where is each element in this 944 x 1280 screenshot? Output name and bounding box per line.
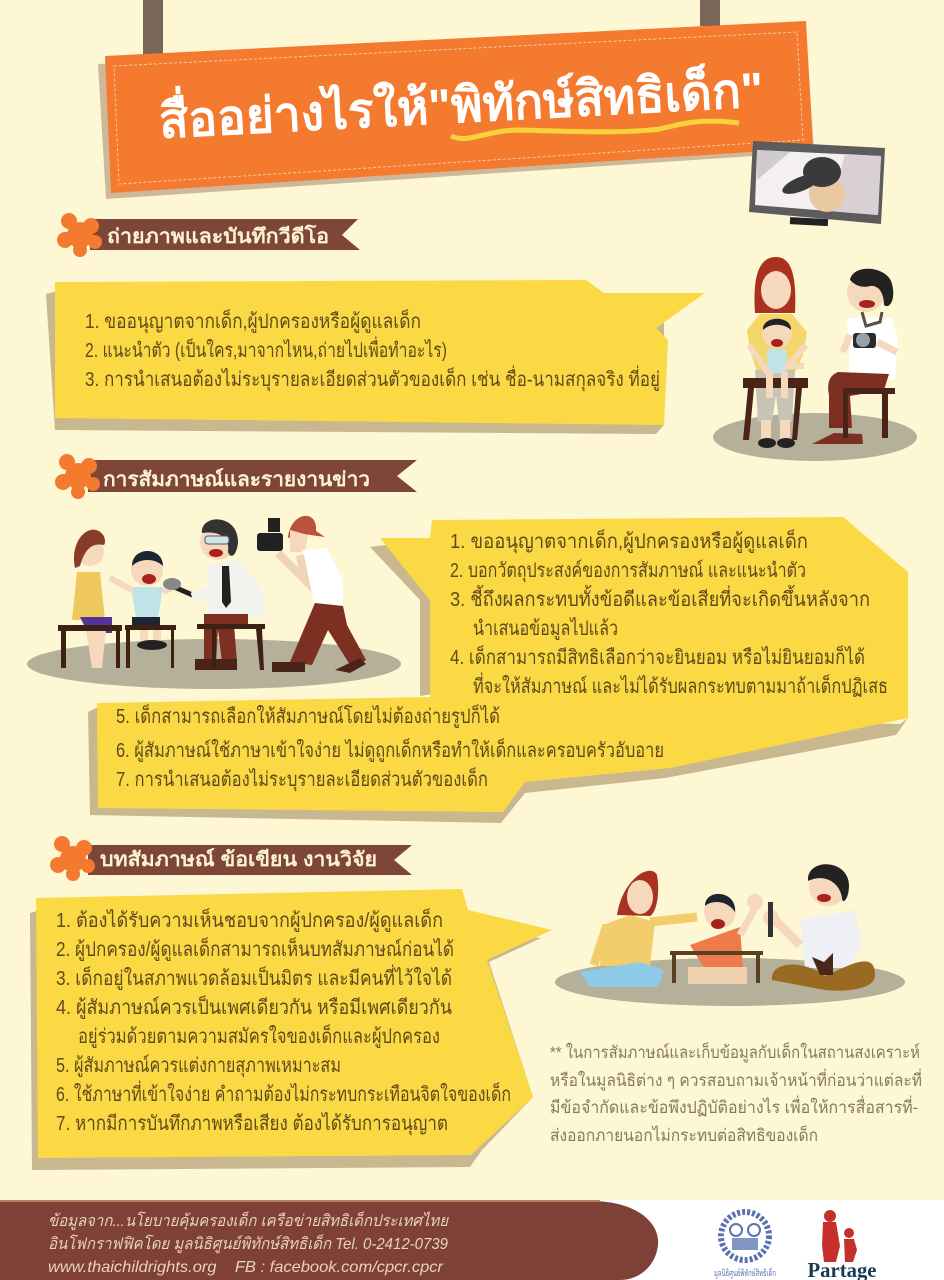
- table: [670, 951, 763, 983]
- panel: section 3 list: 1. ต้องได้รับความเห็นชอบจากผู้ปกครอง/ผู้ดูแลเด็ก: [56, 907, 443, 933]
- icon: orange flower: [50, 836, 95, 881]
- panel: section 2 list: 7. การนำเสนอต้องไม่ระบุรายละเอียดส่วนตัวของเด็ก: [116, 766, 488, 792]
- section 3 heading ribbon: บทสัมภาษณ์ ข้อเขียน งานวิจัย: [100, 848, 377, 871]
- footer credit band: ข้อมูลจาก...นโยบายคุ้มครองเด็ก เครือข่ายสิทธิเด็กประเทศไทย: [48, 1211, 450, 1231]
- footer background: [0, 1200, 944, 1280]
- note text: มีข้อจำกัดและข้อพึงปฏิบัติอย่างไร เพื่อให้การสื่อสารที่-: [550, 1095, 918, 1117]
- reporter: [200, 524, 236, 560]
- panel: section 3 list: 7. หากมีการบันทึกภาพหรือเสียง ต้องได้รับการอนุญาต: [56, 1112, 448, 1136]
- panel: section 1 list: 2. แนะนำตัว (เป็นใคร,มาจากไหน,ถ่ายไปเพื่อทำอะไร): [85, 336, 447, 362]
- icon: tv with masked child: [749, 141, 885, 226]
- illustration: interview with reporter and cameraman: [27, 516, 401, 689]
- section 1 heading ribbon: ถ่ายภาพและบันทึกวีดีโอ: [107, 224, 329, 248]
- woman: [617, 871, 658, 916]
- panel: section 3 list: 4. ผู้สัมภาษณ์ควรเป็นเพศเดียวกัน หรือมีเพศเดียวกัน: [56, 994, 452, 1020]
- note text: [550, 1041, 922, 1145]
- panel: section 2 list: [88, 517, 908, 823]
- panel: section 3 list: 5. ผู้สัมภาษณ์ควรแต่งกายสุภาพเหมาะสม: [56, 1054, 341, 1078]
- panel: section 2 list: 5. เด็กสามารถเลือกให้สัมภาษณ์โดยไม่ต้องถ่ายรูปก็ได้: [116, 703, 500, 729]
- icon: orange flower: [57, 213, 102, 257]
- logo: CPCR foundation: [714, 1212, 776, 1279]
- footer credit band: www.thaichildrights.org FB : facebook.com/cpcr.cpcr: [48, 1259, 444, 1276]
- mother's chair: [743, 378, 808, 440]
- panel: section 2 list: 1. ขออนุญาตจากเด็ก,ผู้ปกครองหรือผู้ดูแลเด็ก: [450, 528, 808, 554]
- panel: section 3 list: 3. เด็กอยู่ในสภาพแวดล้อมเป็นมิตร และมีคนที่ไว้ใจได้: [56, 964, 452, 991]
- woman: [76, 538, 104, 566]
- section 2 heading ribbon: [55, 454, 417, 499]
- panel: section 3 list: 6. ใช้ภาษาที่เข้าใจง่าย คำถามต้องไม่กระทบกระเทือนจิตใจของเด็ก: [56, 1080, 511, 1106]
- panel: section 3 list: 2. ผู้ปกครอง/ผู้ดูแลเด็กสามารถเห็นบทสัมภาษณ์ก่อนได้: [56, 936, 454, 962]
- boy: [704, 896, 736, 928]
- panel: section 2 list: 3. ชี้ถึงผลกระทบทั้งข้อดีและข้อเสียที่จะเกิดขึ้นหลังจาก: [450, 585, 870, 611]
- panel: section 2 list: 2. บอกวัตถุประสงค์ของการสัมภาษณ์ และแนะนำตัว: [450, 559, 806, 583]
- panel: section 1 list: 3. การนำเสนอต้องไม่ระบุรายละเอียดส่วนตัวของเด็ก เช่น ชื่อ-นามสกุลจริง ที่อยู่: [85, 365, 660, 392]
- section 3 heading ribbon: [50, 836, 412, 881]
- footer credit band: อินโฟกราฟฟิคโดย มูลนิธิศูนย์พิทักษ์สิทธิเด็ก Tel. 0-2412-0739: [48, 1234, 448, 1254]
- cameraman: [288, 516, 325, 538]
- panel: section 3 list: [30, 889, 552, 1170]
- panel: section 1 list: [46, 280, 705, 434]
- title underline squiggle: [451, 121, 739, 138]
- illustration: mother, child and photographer seated: [713, 257, 917, 461]
- section 1 heading ribbon: [57, 213, 360, 257]
- note text: ส่งออกภายนอกไม่กระทบต่อสิทธิของเด็ก: [550, 1124, 818, 1145]
- section 2 heading ribbon: การสัมภาษณ์และรายงานข่าว: [103, 468, 370, 491]
- panel: section 1 list: 1. ขออนุญาตจากเด็ก,ผู้ปกครองหรือผู้ดูแลเด็ก: [85, 308, 421, 334]
- illustration: family sitting on floor with table: [555, 864, 905, 1006]
- footer credit band: [0, 1200, 658, 1280]
- panel: section 2 list: นำเสนอข้อมูลไปแล้ว: [473, 617, 618, 641]
- man: [809, 868, 847, 906]
- panel: section 2 list: 6. ผู้สัมภาษณ์ใช้ภาษาเข้าใจง่าย ไม่ดูถูกเด็กหรือทำให้เด็กและครอบครัวอับอาย: [116, 737, 664, 763]
- logo: Partage: [808, 1210, 876, 1280]
- icon: orange flower: [55, 454, 100, 499]
- panel: section 2 list: 4. เด็กสามารถมีสิทธิเลือกว่าจะยินยอม หรือไม่ยินยอมก็ได้: [450, 644, 865, 669]
- photographer: [847, 318, 898, 380]
- title: สื่ออย่างไรให้"พิทักษ์สิทธิเด็ก": [157, 54, 765, 149]
- mother: [754, 257, 795, 313]
- child: [762, 318, 792, 348]
- microphone: [172, 586, 197, 597]
- panel: section 3 list: อยู่ร่วมด้วยตามความสมัครใจของเด็กและผู้ปกครอง: [78, 1023, 440, 1049]
- boy: [131, 554, 163, 586]
- logo: CPCR foundation: มูลนิธิศูนย์พิทักษ์สิทธิเด็ก: [714, 1266, 776, 1279]
- title banner: [98, 21, 814, 199]
- banner posts: [143, 0, 720, 54]
